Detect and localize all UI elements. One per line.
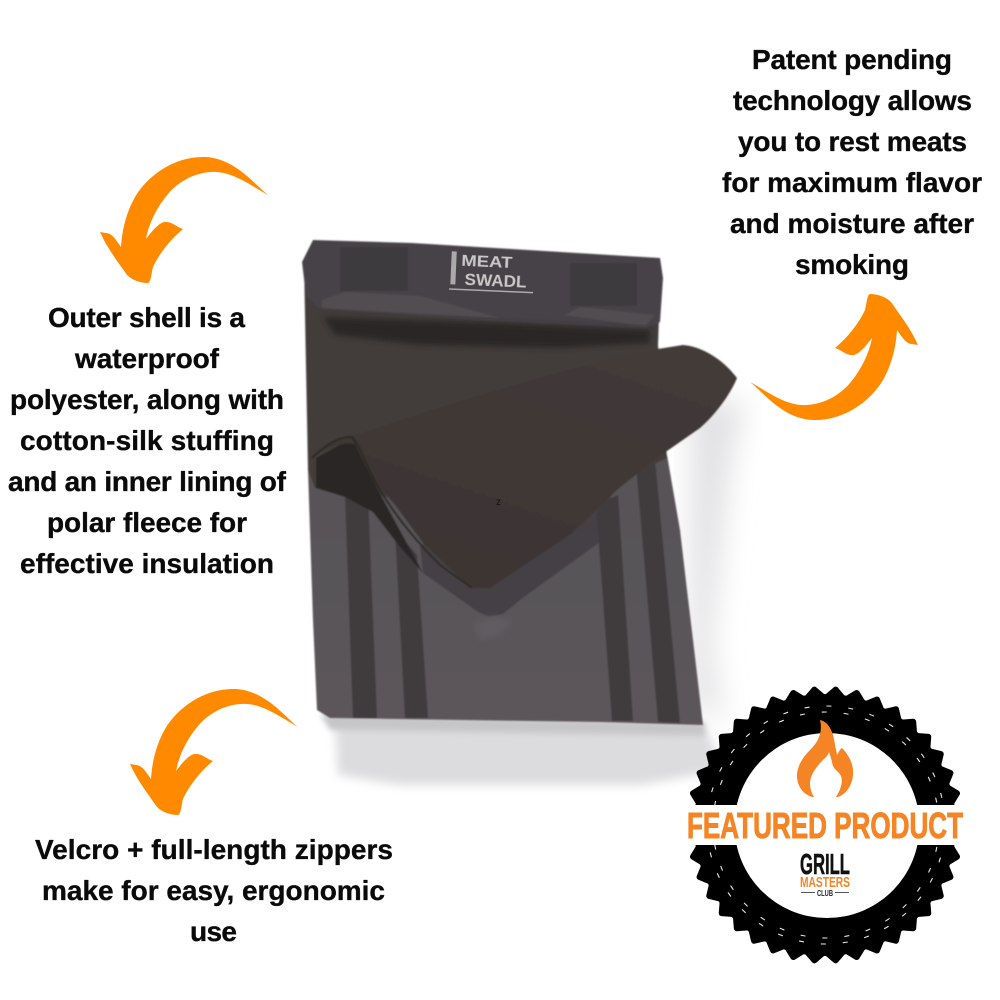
folded-over fleece flap	[312, 345, 737, 588]
grill masters club logo: CLUB	[817, 889, 833, 898]
text: patent pending description: for maximum flavor	[722, 167, 982, 198]
text: outer shell description: waterproof	[74, 343, 220, 374]
text: velcro and zippers description: make for easy, ergonomic	[42, 875, 385, 906]
lower body of the blanket	[308, 455, 703, 725]
text: outer shell description	[8, 302, 287, 579]
text: outer shell description: and an inner lining of	[8, 466, 287, 497]
brand label on flap: SWADL	[464, 270, 527, 292]
text: patent pending description: smoking	[795, 249, 909, 280]
text: patent pending description: you to rest meats	[738, 126, 967, 157]
arrow: top left	[100, 157, 268, 283]
text: velcro and zippers description	[35, 834, 393, 947]
badge: featured product	[680, 690, 970, 960]
shadow under the top flap	[323, 317, 650, 348]
velcro patch left	[340, 247, 408, 291]
arrow: bottom left	[130, 689, 298, 815]
velcro patch right	[570, 263, 637, 306]
text: velcro and zippers description: use	[190, 916, 237, 947]
shadow of the fold on the body	[420, 490, 612, 617]
flame icon	[797, 720, 853, 797]
text: outer shell description: effective insulation	[20, 548, 274, 579]
ridges on band	[322, 292, 500, 318]
text: patent pending description: Patent pending	[752, 44, 952, 75]
grill masters club logo: GRILL	[800, 849, 850, 881]
scalloped black seal	[690, 690, 960, 960]
stray letter: z	[496, 497, 501, 508]
text: outer shell description: cotton-silk stuffing	[20, 425, 274, 456]
grill masters club logo	[800, 849, 850, 898]
text: outer shell description: polyester, along with	[10, 384, 284, 415]
stitching ring	[707, 706, 945, 944]
flap piping edge	[312, 437, 472, 588]
text: outer shell description: Outer shell is a	[48, 302, 245, 333]
text: velcro and zippers description: Velcro + full-length zippers	[35, 834, 393, 865]
top flap band	[302, 240, 663, 328]
grill masters club logo: MASTERS	[800, 874, 850, 891]
text: patent pending description: technology allows	[733, 85, 972, 116]
text: patent pending description	[722, 44, 982, 280]
text: outer shell description: polar fleece for	[47, 507, 247, 538]
dark pocket under the fold	[316, 438, 423, 573]
white band	[680, 805, 970, 845]
product photo: meat swaddle blanket	[302, 240, 745, 785]
brand label on flap	[449, 251, 535, 293]
text: patent pending description: and moisture after	[730, 208, 974, 239]
soft shadow under product	[335, 722, 725, 785]
velcro stripes	[345, 495, 377, 718]
white centre	[734, 733, 920, 918]
brand label on flap: MEAT	[461, 253, 513, 272]
fleece lining interior	[304, 262, 667, 500]
arrow: top right	[750, 294, 918, 420]
crease highlight on the body	[473, 617, 512, 640]
